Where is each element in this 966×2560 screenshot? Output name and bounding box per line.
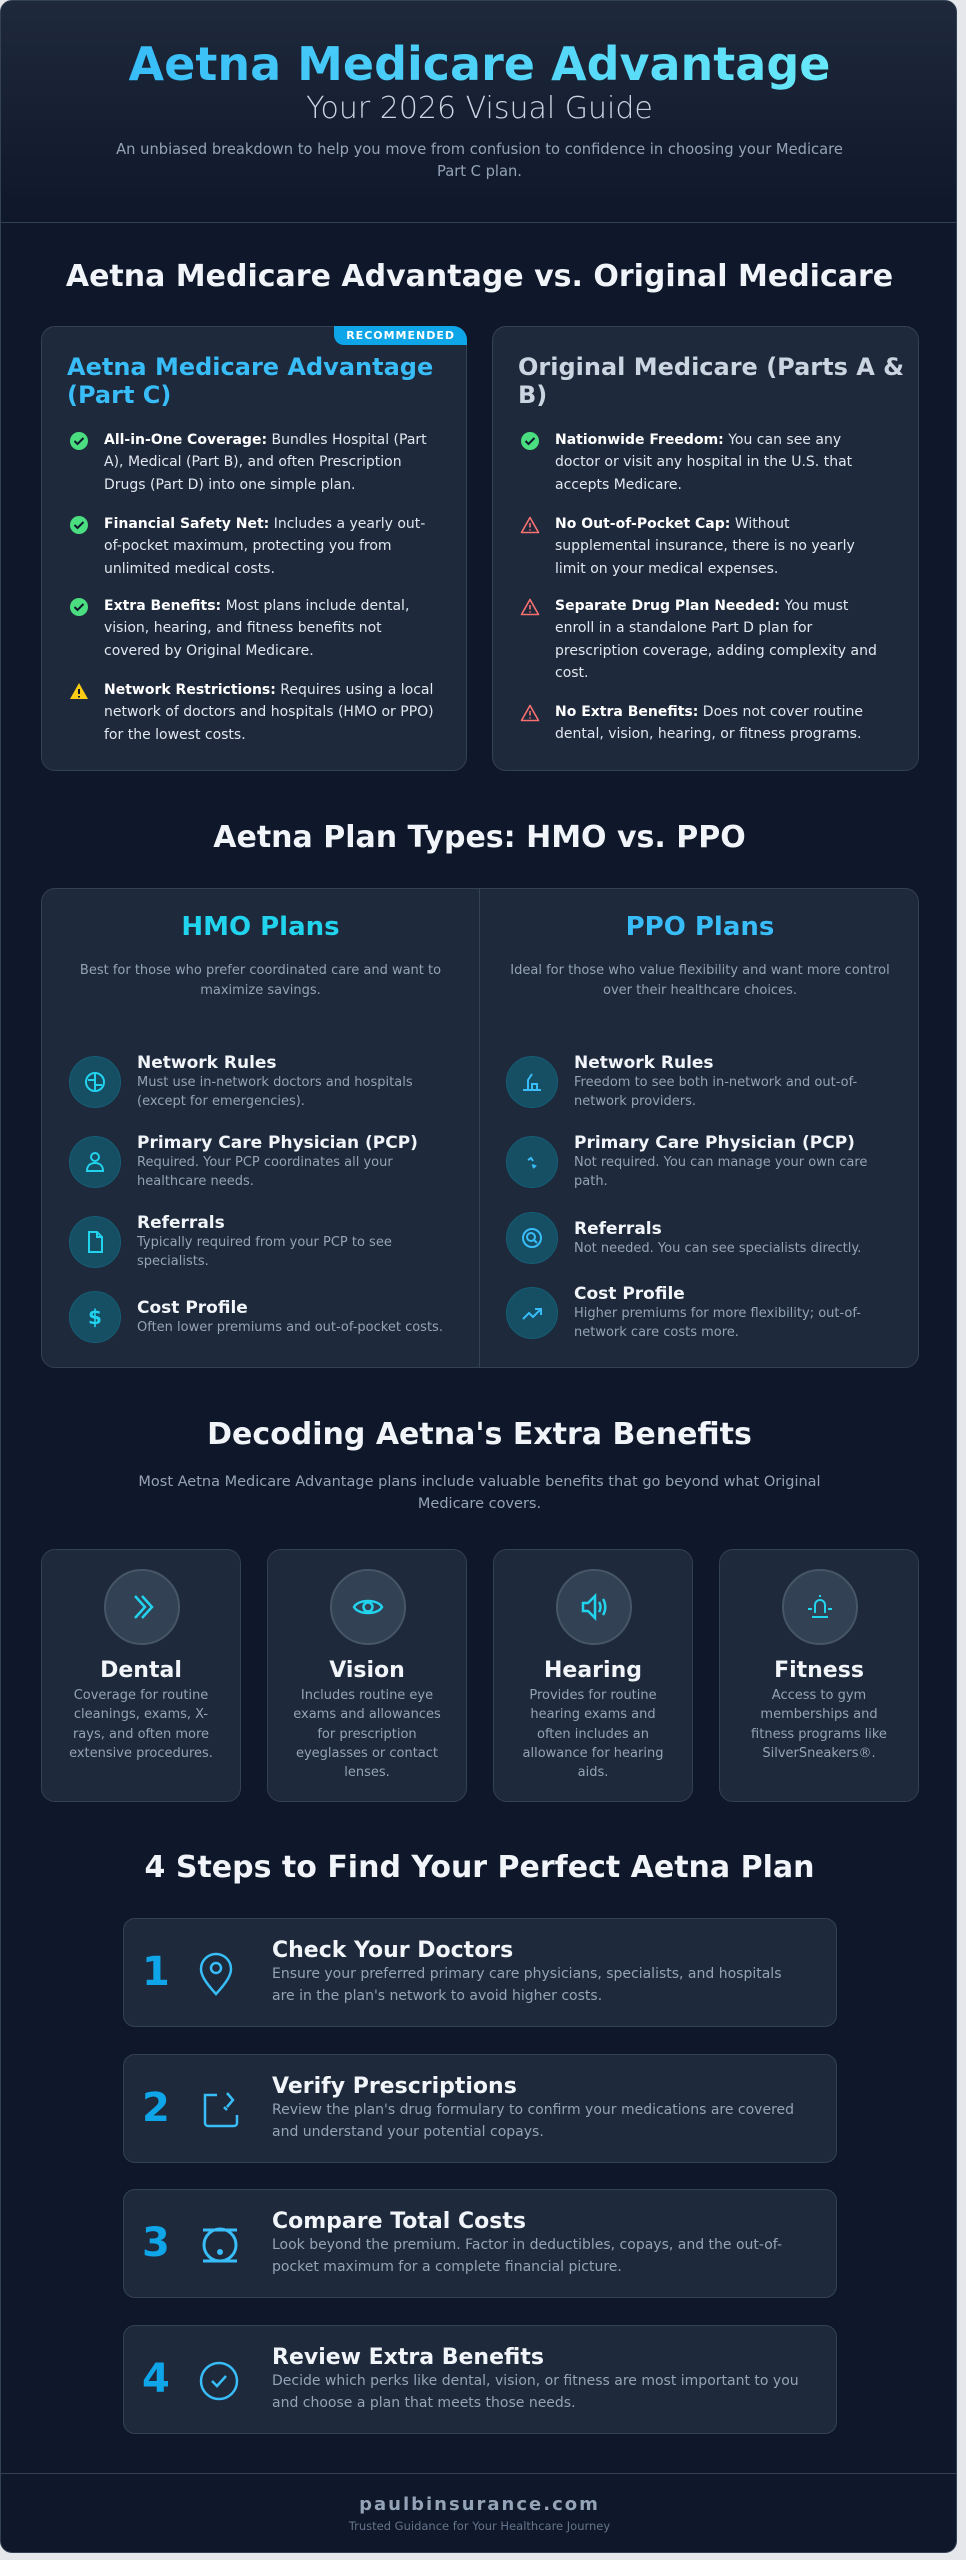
HMO: network rules [69, 1053, 413, 1109]
HMO: network rules: Network Rules [137, 1053, 277, 1073]
step 1: Check Your Doctors [272, 1938, 513, 1963]
item: extra benefits: Extra Benefits: Most plans include dental, vision, hearing, and fitness benefits not covered by Original Medicare. [104, 598, 409, 659]
HMO: cost profile: Often lower premiums and out-of-pocket costs. [137, 1320, 443, 1335]
subtitle: Your 2026 Visual Guide [306, 91, 653, 126]
item: no cap: No Out-of-Pocket Cap: Without supplemental insurance, there is no yearly limit on your medical expenses. [555, 516, 855, 577]
heading: extra benefits: Decoding Aetna's Extra Benefits [207, 1417, 752, 1452]
HMO: referrals [69, 1213, 392, 1269]
HMO: cost profile: Cost Profile [137, 1298, 248, 1318]
HMO: network rules: Must use in-network doctors and hospitals (except for emergencies). [137, 1075, 413, 1109]
step 1 [123, 1918, 837, 2027]
icon: speaker [556, 1569, 632, 1645]
HMO title: HMO Plans [181, 912, 340, 942]
HMO: PCP: Primary Care Physician (PCP) [137, 1133, 418, 1153]
card: hearing [493, 1549, 693, 1802]
heading: steps: 4 Steps to Find Your Perfect Aetna Plan [145, 1850, 814, 1885]
card: fitness: Fitness [774, 1658, 864, 1683]
card: fitness [719, 1549, 919, 1802]
PPO: referrals: Not needed. You can see specialists directly. [574, 1241, 861, 1256]
HMO: PCP [69, 1133, 418, 1189]
PPO title: PPO Plans [626, 912, 774, 942]
card: hearing: Hearing [544, 1658, 642, 1683]
step 3 [123, 2189, 837, 2298]
PPO: cost profile: Higher premiums for more flexibility; out-of-network care costs more. [574, 1306, 861, 1340]
panel: Original Medicare [492, 326, 919, 771]
PPO: PCP: Primary Care Physician (PCP) [574, 1133, 855, 1153]
item: all-in-one: All-in-One Coverage: Bundles Hospital (Part A), Medical (Part B), and often Prescription Drugs (Part D) into one simple plan. [104, 432, 427, 493]
HMO: PCP: Required. Your PCP coordinates all your healthcare needs. [137, 1155, 393, 1189]
card: vision: Includes routine eye exams and allowances for prescription eyeglasses or contact lenses. [293, 1688, 441, 1780]
PPO: PCP [506, 1133, 867, 1189]
item: network restrictions: Network Restrictions: Requires using a local network of doctors and hospitals (HMO or PPO) for the lowest costs. [104, 682, 434, 743]
footer: Trusted Guidance for Your Healthcare Journey [349, 2519, 610, 2533]
PPO: network rules: Network Rules [574, 1053, 714, 1073]
icon: fitness [782, 1569, 858, 1645]
panel title: Aetna Medicare Advantage (Part C) [67, 353, 433, 409]
panel: Aetna Medicare Advantage [41, 326, 467, 771]
HMO: referrals: Typically required from your PCP to see specialists. [137, 1235, 392, 1269]
panel: HMO vs PPO [41, 888, 919, 1368]
step 4: Review Extra Benefits [272, 2345, 544, 2370]
heading: comparison: Aetna Medicare Advantage vs. Original Medicare [66, 259, 893, 294]
PPO: network rules: Freedom to see both in-network and out-of-network providers. [574, 1075, 857, 1109]
card: dental [41, 1549, 241, 1802]
PPO: network rules [506, 1053, 857, 1109]
step 3: 3 [142, 2220, 170, 2266]
card: dental: Coverage for routine cleanings, exams, X-rays, and often more extensive procedures. [69, 1688, 213, 1761]
icon: dental [104, 1569, 180, 1645]
badge: recommended [334, 326, 467, 345]
badge: recommended: RECOMMENDED [346, 329, 455, 342]
step 4 [123, 2325, 837, 2434]
step 3: Compare Total Costs [272, 2209, 526, 2234]
item: separate drug plan: Separate Drug Plan Needed: You must enroll in a standalone Part D plan for prescription coverage, adding complexity and cost. [555, 598, 877, 681]
step 2: Verify Prescriptions [272, 2074, 517, 2099]
step 2: Review the plan's drug formulary to confirm your medications are covered and understand your potential copays. [272, 2102, 794, 2140]
HMO: referrals: Referrals [137, 1213, 225, 1233]
step 4: 4 [142, 2356, 170, 2402]
item: no extras: No Extra Benefits: Does not cover routine dental, vision, hearing, or fitness programs. [555, 704, 863, 742]
panel title: Original Medicare (Parts A & B) [518, 353, 904, 409]
step 2: 2 [142, 2085, 170, 2131]
benefits intro: Most Aetna Medicare Advantage plans include valuable benefits that go beyond what Original Medicare covers. [138, 1474, 821, 1512]
intro text: An unbiased breakdown to help you move from confusion to confidence in choosing your Medicare Part C plan. [116, 141, 843, 180]
step 1: Ensure your preferred primary care physicians, specialists, and hospitals are in the plan's network to avoid higher costs. [272, 1966, 781, 2004]
item: nationwide: Nationwide Freedom: You can see any doctor or visit any hospital in the U.S. that accepts Medicare. [555, 432, 852, 493]
PPO: cost profile [506, 1284, 861, 1340]
header [1, 1, 958, 223]
HMO description: Best for those who prefer coordinated care and want to maximize savings. [80, 963, 441, 998]
card: vision: Vision [329, 1658, 405, 1683]
icon: eye [330, 1569, 406, 1645]
footer: paulbinsurance.com [359, 2494, 600, 2515]
card: fitness: Access to gym memberships and fitness programs like SilverSneakers®. [751, 1688, 887, 1761]
card: dental: Dental [100, 1658, 182, 1683]
heading: plan types: Aetna Plan Types: HMO vs. PPO [213, 820, 746, 855]
step 3: Look beyond the premium. Factor in deductibles, copays, and the out-of-pocket maximum for a complete financial picture. [272, 2237, 782, 2275]
item: safety net: Financial Safety Net: Includes a yearly out-of-pocket maximum, protecting you from unlimited medical costs. [104, 516, 425, 577]
step 2 [123, 2054, 837, 2163]
card: hearing: Provides for routine hearing exams and often includes an allowance for hearing aids. [523, 1688, 663, 1780]
step 1: 1 [142, 1949, 170, 1995]
HMO: cost profile [69, 1291, 443, 1343]
PPO description: Ideal for those who value flexibility and want more control over their healthcare choices. [510, 963, 890, 998]
title: Aetna Medicare Advantage [129, 37, 830, 91]
PPO: PCP: Not required. You can manage your own care path. [574, 1155, 867, 1189]
PPO: referrals: Referrals [574, 1219, 662, 1239]
HMO: cost profile: $ [88, 1305, 102, 1329]
PPO: cost profile: Cost Profile [574, 1284, 685, 1304]
footer [1, 2473, 958, 2554]
PPO: referrals [506, 1212, 861, 1264]
card: vision [267, 1549, 467, 1802]
step 4: Decide which perks like dental, vision, or fitness are most important to you and choose a plan that meets those needs. [272, 2373, 799, 2411]
